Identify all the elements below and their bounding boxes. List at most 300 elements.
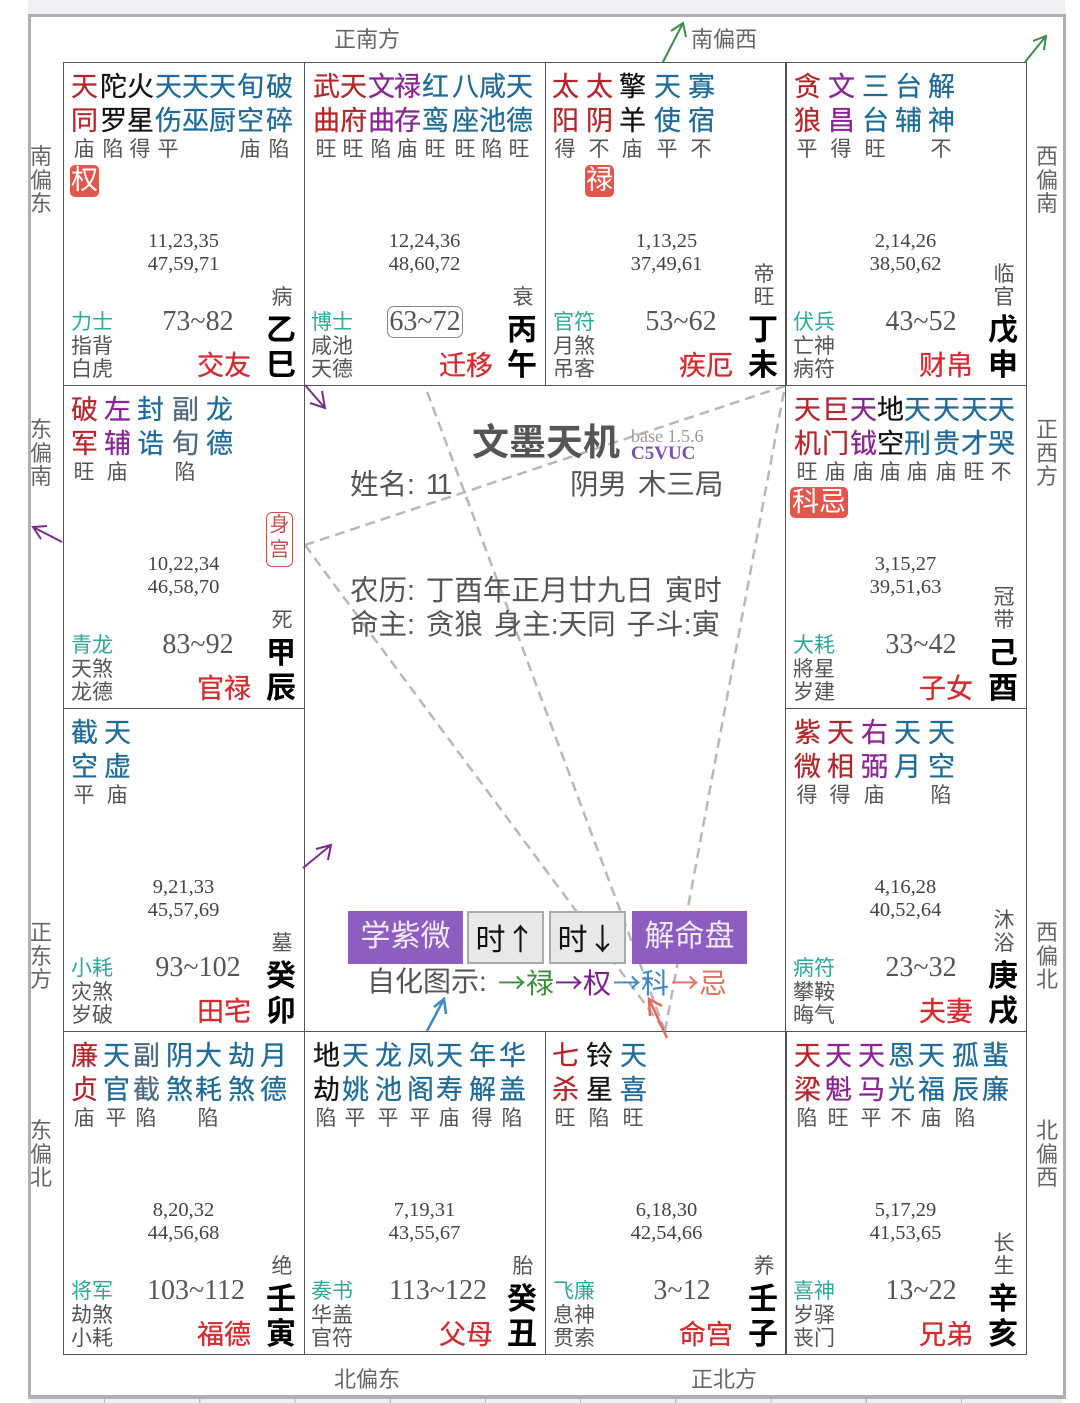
minor gods: 病符 [793,957,835,980]
stem branch [988,959,1018,1029]
direction label: 西偏南 [1036,144,1058,216]
stars [552,72,715,161]
minor gods [311,1280,355,1350]
stars [304,1032,544,1354]
stem branch [748,1282,778,1352]
stars: 不 [930,138,952,161]
stars: 天 [620,1041,647,1071]
panel: 戌 palace [785,708,1027,1032]
ages: 3,15,27 [875,553,936,575]
ages: 9,21,33 [153,876,214,898]
stars: 陀 [100,72,127,102]
stars: 禄 [394,72,421,102]
stars: 杀 [552,1075,579,1105]
decade range: 33~42 [885,629,957,660]
button: 时↓ [549,911,626,964]
stem branch: 丁 [748,314,778,347]
stars: 台 [862,106,889,136]
stars: 年 [469,1041,496,1071]
stars: 武 [313,72,340,102]
stars: 贞 [71,1075,98,1105]
stars: 庙 [852,461,874,484]
direction label: 东偏南 [30,417,52,489]
changsheng: 长 [994,1232,1014,1255]
arrow: purple from 卯 [298,840,336,872]
stem branch: 卯 [266,995,296,1028]
minor gods [71,1280,115,1350]
changsheng [989,1232,1019,1278]
stars: 同 [71,106,98,136]
stars: 旺 [342,138,364,161]
stars: 姚 [342,1075,369,1105]
ages: 48,60,72 [389,253,460,275]
badge: 身宫 [266,512,293,567]
ages: 1,13,25 [636,230,697,252]
stars: 平 [158,138,178,161]
stars: 辅 [104,429,131,459]
ages [148,230,219,275]
stem branch: 壬 [266,1283,296,1316]
stem branch [266,960,296,1028]
stars: 马 [858,1075,885,1105]
minor gods [553,311,595,381]
name: 姓名: 11 [350,469,449,501]
stars: 伤 [155,106,182,136]
stars: 龙 [375,1041,402,1071]
changsheng: 养 [754,1255,774,1278]
stars: 陷 [954,1107,976,1130]
ages [870,553,941,598]
stem branch [988,314,1018,382]
stars: 旺 [864,138,886,161]
direction label: 正东方: 正 [30,920,52,945]
ages: 41,53,65 [870,1222,941,1244]
stem branch: 丑 [507,1318,537,1351]
stars: 寡 [688,72,715,102]
badge: 身宫: 身 [270,514,290,536]
palace name: 疾厄 [679,351,733,381]
stars: 阁 [407,1075,434,1105]
minor gods: 喜神 [793,1280,835,1303]
button: 时↑ [467,911,544,964]
direction label: 东偏南: 偏 [30,440,52,466]
self-transformation legend: 自化图示: [367,966,487,997]
minor gods: 将军 [71,1280,113,1303]
ages: 8,20,32 [153,1199,214,1221]
changsheng: 衰 [512,286,534,309]
decade range: 73~82 [162,306,234,337]
badge: 权: 权 [71,165,98,195]
ages: 6,18,30 [636,1199,697,1221]
minor gods: 亡神 [793,334,835,358]
stars: 得 [130,138,150,161]
stars: 煞 [166,1075,193,1105]
stars: 天 [155,72,182,102]
changsheng: 生 [994,1255,1014,1278]
direction label: 正东方: 方 [30,967,52,992]
minor gods: 华盖 [311,1304,353,1326]
direction label: 正西方: 正 [1036,417,1058,442]
stars: 庙 [106,461,128,484]
ages [786,876,1025,922]
stars: 擎 [619,72,646,102]
minor gods: 月煞 [553,334,595,358]
stars: 庙 [824,461,846,484]
stem branch: 酉 [988,672,1018,705]
stars: 耗 [195,1075,222,1105]
direction label: 北偏西: 偏 [1036,1142,1058,1166]
stars: 截 [71,718,98,748]
direction label: 正北方: 正北方 [691,1367,757,1392]
self-transformation legend: →权 [555,962,611,1002]
stars: 不 [990,461,1012,484]
stars: 得 [830,138,852,161]
stem branch: 癸 [266,960,296,993]
stars: 天 [918,1041,945,1071]
changsheng: 病 [272,286,292,309]
stars: 庙 [936,461,956,484]
minor gods: 小耗 [71,1327,113,1350]
button: 解命盘 [632,911,747,964]
stars: 右 [861,718,888,748]
stars: 神 [928,106,955,136]
direction label: 西偏北: 偏 [1036,944,1058,968]
minor gods: 小耗 [71,957,113,980]
direction label: 正东方 [30,920,52,992]
minor gods: 官符 [553,311,595,334]
stars: 火 [127,72,154,102]
minor gods: 贯索 [553,1327,595,1350]
stars: 寿 [436,1075,463,1105]
stars: 天 [103,1041,130,1071]
minor gods: 岁建 [793,681,835,704]
minor gods: 官符 [311,1327,353,1350]
minor gods: 丧门 [793,1327,835,1350]
stem branch: 巳 [266,349,296,382]
stem branch: 癸 [507,1283,537,1316]
stars: 煞 [228,1075,255,1105]
stars: 天 [894,718,921,748]
stars: 阴 [166,1041,193,1071]
direction label: 北偏西: 北 [1036,1118,1058,1143]
palace name: 命宫 [679,1320,733,1350]
stars: 劫 [228,1041,255,1071]
badge: 禄: 禄 [586,165,613,195]
panel: 卯 palace [63,708,305,1032]
chart code: C5VUC [631,443,695,464]
direction label: 南偏西: 南偏西 [691,27,757,52]
stars: 巨 [822,395,849,425]
stem branch: 戊 [988,314,1018,347]
decade range: 23~32 [885,952,957,983]
ages [148,553,220,598]
stars: 曲 [313,106,340,136]
stars [794,395,1015,484]
direction label: 南偏东: 偏 [30,168,52,192]
stars: 天 [209,72,236,102]
stars: 曲 [368,106,395,136]
stars [71,395,233,484]
changsheng: 绝 [272,1255,292,1278]
changsheng: 沐 [994,909,1014,932]
stars [794,718,955,807]
stars: 红 [422,72,449,102]
decade range: 113~122 [389,1275,487,1306]
minor gods: 指背 [71,334,113,358]
stars: 天 [928,718,955,748]
stars: 庙 [106,784,128,807]
stars: 庙 [240,138,260,161]
badge: 科忌: 科忌 [792,487,846,517]
stem branch [988,637,1018,705]
changsheng: 死 [272,609,292,632]
stars [545,1032,785,1354]
stars: 鸾 [422,106,449,136]
minor gods: 奏书 [311,1280,353,1303]
stem branch: 己 [988,637,1018,670]
ages: 5,17,29 [875,1199,936,1221]
stars: 副 [133,1041,160,1071]
stars: 福 [918,1075,945,1105]
direction label: 北偏西: 西 [1036,1165,1058,1190]
stars: 旺 [316,138,336,161]
stars: 旺 [622,1107,644,1130]
stars [63,1032,303,1354]
stars: 庙 [74,1107,94,1130]
stars: 池 [479,106,506,136]
stars: 微 [794,752,821,782]
stars [71,72,293,161]
stars: 凤 [407,1041,434,1071]
arrow: purple from 巳 [300,380,330,414]
stars: 天 [794,1041,821,1071]
changsheng: 墓 [272,932,292,955]
stars: 相 [827,752,854,782]
stem branch: 甲 [266,637,296,670]
stars: 得 [796,784,818,807]
stars: 旺 [964,461,984,484]
changsheng [754,263,774,309]
palace name: 财帛 [919,351,973,381]
minor gods: 岁驿 [793,1304,835,1326]
stars: 庙 [864,784,884,807]
stars: 羊 [619,106,646,136]
stars: 天 [794,395,821,425]
life and body master: 命主: 贪狼 身主:天同 子斗:寅 [350,609,720,641]
stars: 太 [552,72,579,102]
stem branch [266,314,296,382]
button: 解命盘: 解命盘 [644,920,734,953]
stars: 军 [71,429,98,459]
ages: 47,59,71 [148,253,219,275]
minor gods: 將星 [793,658,835,680]
stars: 光 [888,1075,915,1105]
stars: 得 [554,138,576,161]
stars: 旺 [554,1107,576,1130]
minor gods: 博士 [311,311,353,334]
decade range: 3~12 [653,1275,711,1306]
stars: 贪 [794,72,821,102]
stars: 平 [378,1107,398,1130]
stars: 天 [961,395,988,425]
stem branch: 乙 [266,314,296,347]
ages [305,1199,544,1245]
stars: 钺 [850,429,877,459]
direction label: 西偏北: 北 [1036,967,1058,992]
minor gods: 天煞 [71,658,113,680]
arrow: red from 子 [642,994,672,1042]
panel: 丑 palace [304,1031,546,1355]
bottom page band [31,1399,1063,1403]
stem branch: 子 [748,1318,778,1351]
stars: 天 [182,72,209,102]
direction label: 正西方 [1036,417,1058,489]
stars: 咸 [479,72,506,102]
stars: 罗 [100,106,127,136]
stars: 陷 [174,461,196,484]
self-transformation legend: →忌 [671,962,727,1002]
stars: 庙 [906,461,928,484]
ages: 10,22,34 [148,553,219,575]
stars: 天 [933,395,960,425]
stars: 空 [71,752,98,782]
ages [148,876,219,921]
direction label: 西偏北 [1036,920,1058,992]
stars [785,1032,1025,1354]
stars: 台 [895,72,922,102]
stars: 宿 [688,106,715,136]
direction label: 正南方: 正南方 [334,27,400,52]
stars: 旺 [796,461,818,484]
stars: 狼 [794,106,821,136]
stars: 不 [690,138,712,161]
stars: 虚 [104,752,131,782]
stars: 旺 [454,138,476,161]
stars: 地 [313,1041,340,1071]
stars: 旺 [508,138,530,161]
stars: 平 [656,138,678,161]
ages: 42,54,66 [631,1222,702,1244]
stars: 辰 [952,1075,979,1105]
stars: 副 [172,395,199,425]
stars: 贵 [933,429,960,459]
stem branch [988,1282,1018,1352]
self-transformation legend [367,965,732,999]
stars: 陷 [316,1107,336,1130]
direction label: 东偏南: 东 [30,417,52,442]
stars: 昌 [828,106,855,136]
stars: 庙 [438,1107,460,1130]
minor gods: 灾煞 [71,980,113,1004]
stem branch: 丙 [507,314,537,347]
button: 学紫微 [348,911,463,964]
changsheng: 带 [994,609,1014,632]
stem branch: 未 [748,349,778,382]
title: 文墨天机 [472,422,620,463]
stars: 解 [469,1075,496,1105]
stem branch [507,314,537,382]
stars: 平 [410,1107,430,1130]
stars: 厨 [209,106,236,136]
stem branch: 壬 [748,1283,778,1316]
changsheng: 冠 [994,586,1014,609]
decade range: 103~112 [147,1275,245,1306]
panel: 寅 palace [63,1031,305,1355]
changsheng [989,909,1019,955]
panel: 子 palace [545,1031,787,1355]
changsheng [994,586,1014,632]
stars: 星 [586,1075,613,1105]
decade range: 53~62 [645,306,717,337]
ages [631,230,702,275]
lunar date: 农历: 丁酉年正月廿九日 寅时 [350,575,722,607]
ages: 38,50,62 [870,253,941,275]
button: 学紫微: 学紫微 [360,920,450,953]
minor gods: 劫煞 [71,1304,113,1326]
stars: 铃 [586,1041,613,1071]
stars: 府 [340,106,367,136]
changsheng: 临 [994,263,1014,286]
stars: 德 [206,429,233,459]
stars: 陷 [482,138,502,161]
stars: 存 [394,106,421,136]
ages [389,230,460,275]
stars: 太 [586,72,613,102]
stars: 三 [862,72,889,102]
stars: 辅 [895,106,922,136]
panel: 申 palace [785,62,1027,386]
direction label: 正东方: 东 [30,944,52,968]
stars: 陷 [268,138,290,161]
stars: 平 [74,784,94,807]
direction label: 东偏北: 偏 [30,1142,52,1166]
stars: 弼 [861,752,888,782]
direction label: 正西方: 方 [1036,464,1058,489]
direction label: 东偏北 [30,1118,52,1190]
direction label: 南偏东 [30,144,52,216]
self-transformation legend: →科 [613,962,669,1002]
ages: 2,14,26 [875,230,936,252]
stars: 平 [344,1107,366,1130]
stars: 天 [342,1041,369,1071]
stars: 机 [794,429,821,459]
stars: 巫 [182,106,209,136]
changsheng: 胎 [512,1255,534,1278]
ages [547,1199,786,1245]
stars: 文 [368,72,395,102]
stars: 平 [106,1107,126,1130]
stars: 天 [71,72,98,102]
stars: 八 [452,72,479,102]
ages: 12,24,36 [389,230,460,252]
stars: 陷 [588,1107,610,1130]
minor gods: 力士 [71,311,113,334]
arrow: purple from 辰 [28,520,66,546]
direction label: 西偏南: 偏 [1036,168,1058,192]
stars: 庙 [920,1107,942,1130]
palace name: 子女 [919,674,973,704]
stars: 陷 [198,1107,218,1130]
stars: 陷 [102,138,124,161]
stars: 解 [928,72,955,102]
stem branch: 戌 [988,995,1018,1028]
changsheng: 官 [994,286,1014,309]
stars: 华 [499,1041,526,1071]
stars: 天 [104,718,131,748]
arrow: green to corner [1020,30,1052,66]
minor gods [553,1280,597,1350]
stars: 陷 [930,784,952,807]
